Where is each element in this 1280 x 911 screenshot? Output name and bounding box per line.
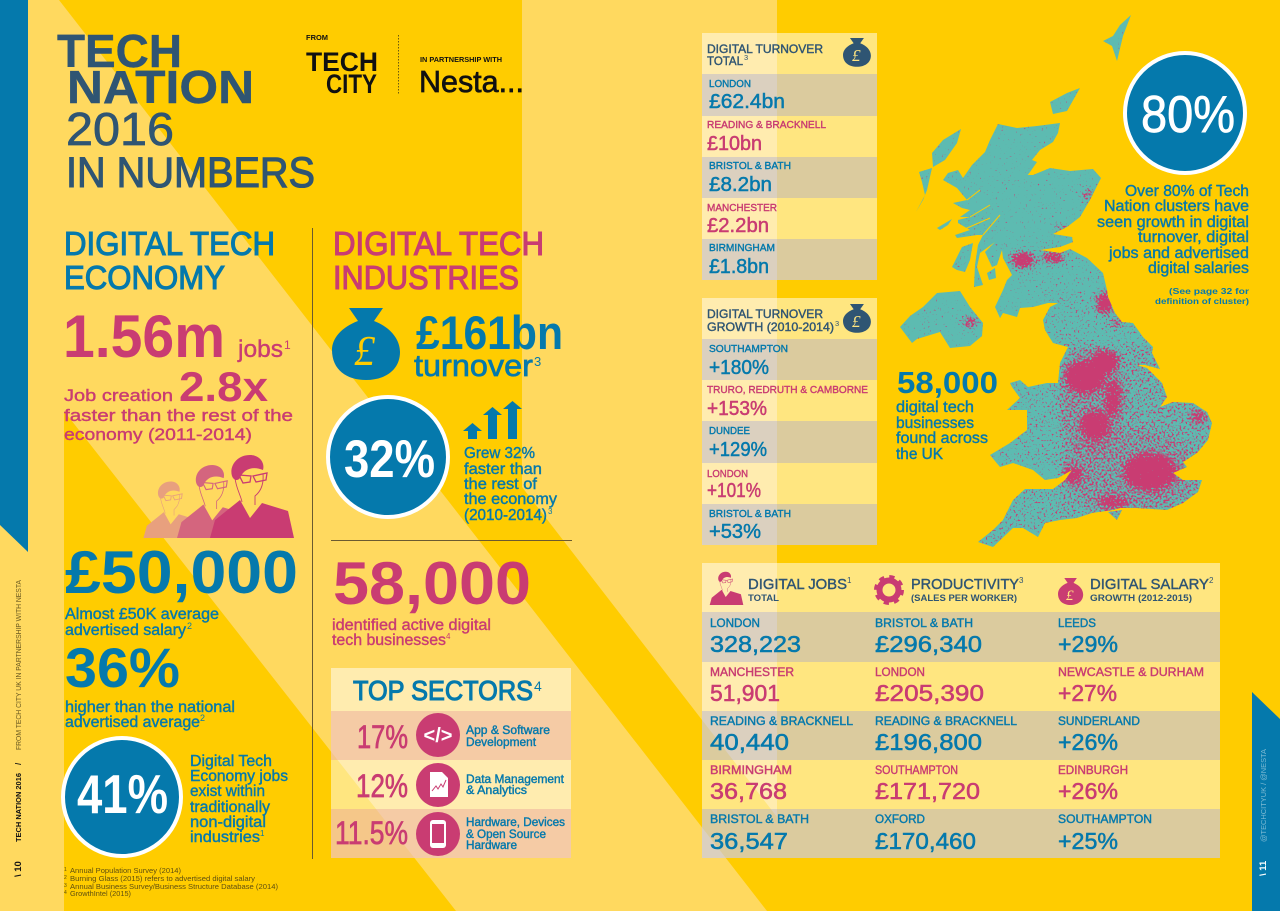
footnotes: 4 [64, 890, 67, 896]
footnotes: 2 [64, 875, 67, 881]
column: digital jobs: 328,223 [710, 631, 801, 657]
heading: productivity [911, 576, 1024, 604]
stat: 58,000 across the UK: the UK [896, 446, 944, 463]
heading [707, 42, 823, 68]
rows: MANCHESTER [707, 202, 777, 214]
column: digital salary: +25% [1058, 828, 1118, 854]
sector: data management: & Analytics [466, 785, 527, 797]
rows: LONDON [709, 78, 751, 90]
column: digital jobs: READING & BRACKNELL [710, 716, 854, 728]
column: digital jobs: LONDON [710, 618, 760, 630]
heading: digital salary: DIGITAL SALARY [1090, 576, 1209, 593]
panel: digital tech industries [328, 225, 572, 858]
stat: 58,000 businesses: tech businesses [332, 632, 446, 649]
footnotes [64, 866, 279, 898]
text: 80 percent description: jobs and advertised [1108, 245, 1249, 262]
logos: Tech City and Nesta: CITY [326, 69, 377, 99]
rows: £62.4bn [709, 90, 785, 113]
sector: hardware: 11.5% [335, 815, 408, 851]
text: 80 percent description: digital salaries [1148, 260, 1249, 277]
text: 80 percent description: turnover, digital [1138, 229, 1249, 246]
column: digital salary: LEEDS [1058, 618, 1096, 630]
column: digital jobs [710, 572, 854, 854]
column: digital jobs: BIRMINGHAM [710, 765, 792, 777]
text: growth description [464, 445, 557, 524]
stat: job creation 2.8x: 2.8x [179, 363, 269, 410]
logos: Tech City and Nesta: Nesta... [419, 64, 524, 99]
right side running text: \ 11 [1258, 860, 1269, 876]
stat: 161bn turnover: turnover [414, 348, 533, 383]
panel: digital turnover growth [702, 298, 877, 545]
heading: digital jobs [748, 576, 852, 604]
panel: digital tech economy [63, 225, 298, 898]
rows: +129% [709, 438, 767, 461]
footnotes: Annual Population Survey (2014) [70, 866, 182, 875]
heading: digital jobs: 1 [847, 576, 852, 585]
heading: DIGITAL TURNOVER [707, 307, 823, 321]
stat: 1.56m jobs: 1.56m [63, 303, 225, 370]
sector: hardware: & Open Source [466, 829, 546, 841]
rows: £2.2bn [707, 214, 769, 237]
stat: 58,000 across the UK: 58,000 [897, 365, 998, 400]
stat: 1.56m jobs: jobs [237, 336, 283, 363]
heading: digital salary: 2 [1209, 576, 1214, 585]
stat: 50,000 salary: £50,000 [65, 539, 298, 606]
text: 41 percent description: industries [190, 829, 260, 846]
callout: 32 percent circle [328, 397, 448, 517]
stat: job creation 2.8x: economy (2011-2014) [64, 425, 252, 444]
column: productivity: BRISTOL & BATH [875, 618, 973, 630]
text: growth description: (2010-2014) [464, 507, 547, 524]
column: productivity: LONDON [875, 667, 925, 679]
text: 80 percent description: (See page 32 for [1169, 286, 1250, 296]
column: digital jobs: 36,768 [710, 778, 787, 804]
text: 80 percent description: definition of cluster) [1155, 296, 1249, 306]
heading: DIGITAL TURNOVER [707, 42, 823, 56]
column: digital salary [1058, 576, 1214, 854]
column: digital salary: +27% [1058, 680, 1117, 706]
stat: 36 percent: 2 [200, 713, 205, 723]
logos: Tech City and Nesta: TECH [306, 47, 378, 77]
heading: top sectors: TOP SECTORS [353, 675, 533, 706]
text: 80 percent description [1097, 183, 1250, 306]
column divider [312, 228, 314, 859]
text: 41 percent description: 1 [260, 829, 265, 838]
icon: money bag: £ [852, 46, 861, 65]
stat: 36 percent: 36% [65, 636, 180, 699]
rows: £10bn [707, 132, 762, 155]
heading: GROWTH (2010-2014) [707, 320, 834, 334]
column: digital salary: +26% [1058, 729, 1118, 755]
heading: digital jobs: TOTAL [748, 593, 779, 604]
heading: top sectors: 4 [534, 678, 542, 694]
right page blue ribbon [1252, 692, 1280, 911]
map: UK digital tech businesses [900, 15, 1220, 550]
title: TECH [57, 25, 182, 77]
column: productivity: SOUTHAMPTON [875, 765, 958, 777]
footnotes: GrowthIntel (2015) [70, 889, 131, 898]
column: productivity: £196,800 [875, 729, 982, 755]
text: 80 percent description: Over 80% of Tech [1125, 183, 1249, 200]
stat: 58,000 businesses: 58,000 [333, 550, 531, 617]
left side running text [13, 580, 24, 877]
icon: three people [143, 455, 294, 538]
icon: money bag [843, 304, 871, 333]
stat: 58,000 businesses [332, 550, 531, 649]
column: digital salary: EDINBURGH [1058, 765, 1128, 777]
panel: jobs, productivity and salary table [702, 563, 1220, 858]
rows: DUNDEE [709, 425, 750, 437]
callout: 32 percent circle: 32% [344, 430, 435, 489]
text: 41 percent description: Economy jobs [190, 768, 288, 785]
stat: 161bn turnover: £161bn [416, 306, 563, 359]
sector: hardware [335, 812, 565, 856]
icon: money bag: £ [852, 312, 861, 331]
stat: 58,000 businesses: 4 [446, 632, 451, 641]
left side running text: FROM TECH CITY UK IN PARTNERSHIP WITH NESTA [14, 580, 23, 750]
left page blue ribbon [0, 0, 28, 552]
rows: BRISTOL & BATH [709, 160, 791, 172]
column: digital jobs: 51,901 [710, 680, 780, 706]
sector: app and software: Development [466, 737, 537, 749]
stat: 50,000 salary: Almost £50K average [65, 606, 219, 623]
footnotes: Burning Glass (2015) refers to advertised digital salary [70, 874, 255, 883]
right side running text [1258, 749, 1269, 876]
footnotes: 1 [64, 867, 67, 873]
rows: READING & BRACKNELL [707, 119, 826, 131]
logos: Tech City and Nesta: IN PARTNERSHIP WITH [420, 55, 502, 64]
rows: SOUTHAMPTON [709, 343, 788, 355]
rows [707, 78, 826, 278]
icon: money bag [843, 38, 871, 67]
callout: 41 percent circle [63, 738, 181, 856]
title [57, 25, 315, 197]
text: 80 percent description: Nation clusters have [1104, 198, 1249, 215]
stat: 36 percent [65, 636, 235, 731]
heading: productivity: 3 [1019, 576, 1024, 585]
heading [707, 307, 839, 334]
icon: money bag [332, 308, 400, 380]
footnotes: 3 [64, 883, 67, 889]
column: digital jobs: BRISTOL & BATH [710, 814, 809, 826]
heading: digital jobs: DIGITAL JOBS [748, 576, 847, 593]
footnotes: Annual Business Survey/Business Structure Database (2014) [70, 882, 279, 891]
text: 41 percent description: exist within [190, 783, 265, 800]
heading: digital tech industries [333, 225, 544, 296]
rows: +53% [709, 520, 761, 543]
stat: job creation 2.8x: faster than the rest of the [64, 406, 293, 425]
heading: 3 [835, 319, 839, 328]
column: productivity: £205,390 [875, 680, 984, 706]
rows: BIRMINGHAM [709, 242, 775, 254]
icon: three rising arrows [463, 401, 522, 439]
text: growth description: Grew 32% [464, 445, 535, 462]
rows: +153% [707, 397, 767, 420]
sector: app and software: </> [424, 725, 452, 747]
left side running text: / [14, 762, 23, 765]
column: digital salary: +26% [1058, 778, 1118, 804]
rows: +101% [707, 479, 761, 502]
callout: 41 percent circle: 41% [77, 763, 168, 825]
column: digital salary: +29% [1058, 631, 1118, 657]
text: growth description: the rest of [464, 476, 538, 493]
column: digital jobs: MANCHESTER [710, 667, 794, 679]
panel: digital turnover total [702, 33, 877, 280]
left side running text: \ 10 [13, 861, 24, 877]
logos: Tech City and Nesta: FROM [306, 35, 328, 42]
icon: person [710, 572, 743, 605]
heading: digital tech industries: DIGITAL TECH [333, 225, 544, 262]
title: NATION [67, 61, 254, 113]
heading: digital tech economy: ECONOMY [64, 259, 225, 296]
text: 41 percent description [190, 753, 288, 846]
heading: digital tech industries: INDUSTRIES [333, 259, 519, 296]
rows [707, 343, 868, 543]
stat: 58,000 businesses: identified active digital [332, 617, 491, 634]
sector: app and software [357, 713, 550, 757]
heading: productivity: (SALES PER WORKER) [911, 593, 1017, 604]
stat: 50,000 salary: advertised salary [65, 622, 186, 639]
heading: digital salary [1090, 576, 1214, 604]
sector: app and software: 17% [357, 719, 408, 755]
text: 41 percent description: non-digital [190, 814, 266, 831]
column: productivity: READING & BRACKNELL [875, 716, 1018, 728]
stat: 58,000 across the UK: found across [896, 430, 988, 447]
text: 80 percent description: seen growth in digital [1097, 214, 1249, 231]
sector: data management: 12% [356, 768, 408, 804]
sector: app and software: App & Software [466, 725, 550, 737]
icon: money bag: £ [1066, 588, 1074, 604]
title: 2016 [66, 103, 174, 155]
rows: +180% [709, 356, 769, 379]
stat: 50,000 salary: 2 [187, 621, 192, 631]
text: 41 percent description: traditionally [190, 799, 270, 816]
stat: 161bn turnover [414, 306, 563, 383]
sector: data management [356, 763, 565, 807]
column: digital jobs: 40,440 [710, 729, 789, 755]
heading: digital tech economy: DIGITAL TECH [64, 225, 275, 262]
column: productivity: £171,720 [875, 778, 980, 804]
right side running text: @TECHCITYUK / @NESTA [1259, 749, 1268, 842]
heading: 3 [744, 53, 748, 62]
stat: 1.56m jobs: 1 [284, 338, 291, 352]
column: digital jobs: 36,547 [710, 828, 788, 854]
stat: 58,000 across the UK: businesses [896, 415, 974, 432]
stat: 36 percent: advertised average [65, 714, 200, 731]
icon: gear [876, 578, 902, 602]
callout: 80 percent circle: 80% [1141, 86, 1235, 144]
icon: money bag: £ [354, 329, 376, 375]
stat: 50,000 salary [65, 539, 298, 639]
heading: TOTAL [707, 54, 743, 68]
rows: £8.2bn [709, 173, 772, 196]
stat: 58,000 across the UK: digital tech [896, 399, 974, 416]
column: digital salary: SOUTHAMPTON [1058, 814, 1152, 826]
stat: job creation 2.8x [64, 363, 293, 444]
column: productivity: OXFORD [875, 814, 925, 826]
text: growth description: faster than [464, 461, 542, 478]
text: 41 percent description: Digital Tech [190, 753, 272, 770]
heading: productivity: PRODUCTIVITY [911, 576, 1019, 593]
sector: data management: Data Management [466, 774, 565, 786]
rows: LONDON [707, 468, 748, 480]
sector: hardware: Hardware, Devices [466, 817, 565, 829]
column: productivity: £296,340 [875, 631, 982, 657]
title: IN NUMBERS [66, 149, 315, 197]
heading: digital salary: GROWTH (2012-2015) [1090, 593, 1192, 604]
column: productivity [875, 576, 1024, 854]
icon: money bag [1058, 578, 1083, 605]
stat: job creation 2.8x: Job creation [64, 386, 173, 405]
logos: Tech City and Nesta [306, 35, 524, 99]
rows: TRURO, REDRUTH & CAMBORNE [707, 384, 868, 396]
heading: digital tech economy [64, 225, 275, 296]
sector: hardware: Hardware [466, 840, 517, 852]
stat: 161bn turnover: 3 [534, 354, 541, 369]
column: digital salary: SUNDERLAND [1058, 716, 1140, 728]
stat: 58,000 across the UK [896, 365, 998, 463]
column: digital salary: NEWCASTLE & DURHAM [1058, 667, 1204, 679]
text: growth description: the economy [464, 491, 557, 508]
rows: BRISTOL & BATH [709, 508, 791, 520]
stat: 36 percent: higher than the national [65, 699, 235, 716]
panel: top sectors [331, 668, 571, 858]
column: productivity: £170,460 [875, 828, 976, 854]
rows: £1.8bn [709, 255, 769, 278]
left side running text: TECH NATION 2016 [14, 773, 23, 842]
text: growth description: 3 [548, 507, 553, 516]
callout: 80 percent circle [1125, 53, 1245, 173]
